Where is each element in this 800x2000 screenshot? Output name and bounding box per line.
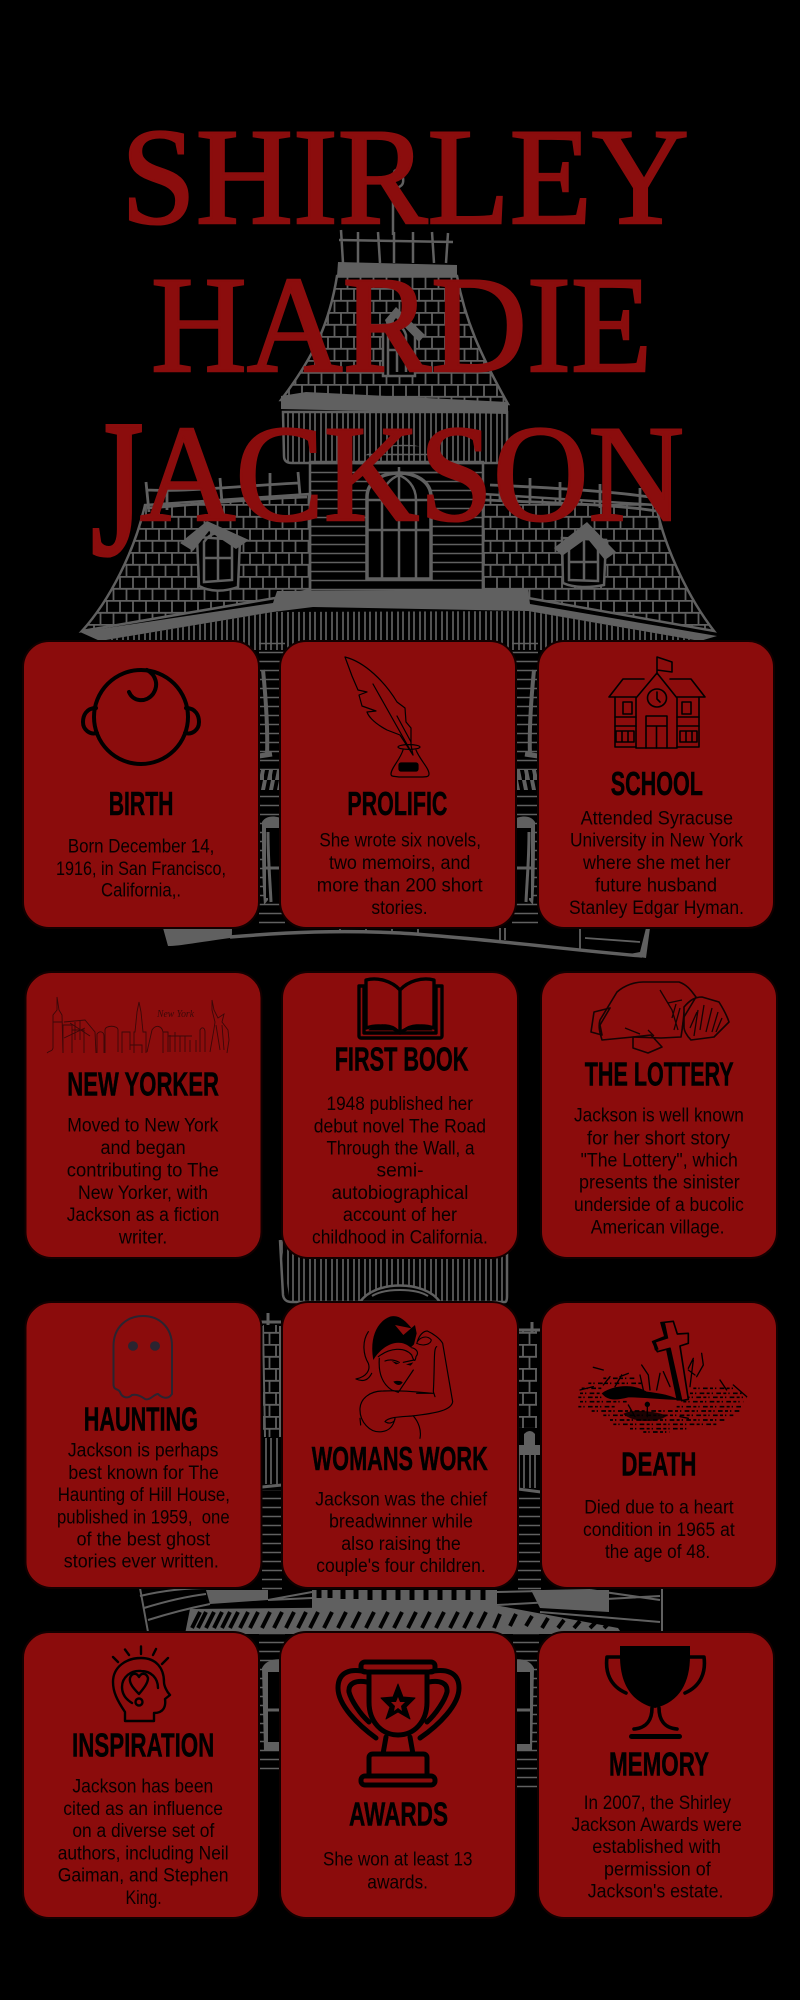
tower body [283,412,507,463]
text: first book: Through the Wall, a [326,1139,475,1160]
text: school: where she met her [582,853,731,874]
skyline caption: New York [156,1009,195,1020]
heading: prolific: PROLIFIC [347,785,447,822]
card: the lottery [541,972,777,1258]
text: prolific: more than 200 short [317,876,483,897]
text: inspiration: Jackson has been [72,1777,213,1798]
house illustration [80,170,717,1790]
icon: grave with cross [578,1321,747,1432]
text: inspiration: authors, including Neil [58,1844,229,1865]
heading: inspiration: INSPIRATION [72,1727,214,1764]
icon: ghost [114,1316,172,1399]
card: birth [23,641,259,928]
heading: first book: FIRST BOOK [335,1041,469,1078]
text: first book: childhood in California. [312,1228,488,1249]
hatching under cornice [100,611,700,650]
text: prolific: stories. [371,898,428,919]
text: prolific [317,831,483,919]
text: inspiration: on a diverse set of [72,1821,215,1842]
text: inspiration: King. [126,1888,162,1909]
icon: quill and ink [345,657,429,777]
wall gap details, fourth row [259,1632,539,1790]
text: new yorker: Moved to New York [67,1116,219,1137]
lower cornice, first row [163,928,650,958]
text: inspiration: cited as an influence [63,1799,223,1820]
text: first book: semi- [376,1161,424,1182]
icon: rocks [591,982,729,1053]
title: HARDIE [151,248,652,401]
text: birth: 1916, in San Francisco, [56,859,226,880]
text: new yorker: New Yorker, with [78,1183,208,1204]
text: haunting: stories ever written. [64,1552,219,1573]
card: memory [538,1632,774,1918]
title: J [91,381,144,597]
text: the lottery: American village. [591,1217,724,1238]
text: school: Stanley Edgar Hyman. [569,898,744,919]
arched door window [352,444,454,579]
text: memory: permission of [604,1860,711,1881]
card: new yorker [26,972,262,1258]
text: the lottery: underside of a bucolic [574,1195,744,1216]
heading: haunting: HAUNTING [84,1401,198,1438]
card: inspiration [23,1632,259,1918]
text: prolific: two memoirs, and [329,853,470,874]
heading: school: SCHOOL [611,765,703,802]
text: the lottery [574,1106,744,1238]
tower band [281,392,508,414]
text: birth: Born December 14, [68,837,214,858]
wall gap details, first row [259,640,286,930]
tower cap [337,262,457,277]
text: womans work [315,1490,488,1577]
text: haunting: of the best ghost [76,1530,211,1551]
text: haunting: Jackson is perhaps [68,1441,218,1462]
text: memory: Jackson's estate. [588,1882,724,1903]
text: first book: autobiographical [332,1183,468,1204]
text: memory [571,1793,742,1903]
title: ACKSON [140,397,684,550]
text: new yorker: writer. [118,1228,167,1249]
brick column, left [260,1313,282,1590]
spire [393,170,403,235]
heading: birth: BIRTH [109,785,174,822]
text: death [583,1498,735,1563]
text: memory: In 2007, the Shirley [584,1793,731,1814]
text: memory: established with [592,1837,721,1858]
text: haunting [57,1441,230,1573]
text: new yorker: Jackson as a fiction [67,1205,219,1226]
heading: womans work: WOMANS WORK [312,1440,488,1477]
text: the lottery: presents the sinister [579,1173,740,1194]
text: haunting: published in 1959, one [57,1507,230,1528]
tower dormer [383,307,425,376]
text: womans work: also raising the [341,1534,461,1555]
card: awards [280,1632,516,1918]
text: school: University in New York [570,831,743,852]
text: womans work: couple's four children. [316,1556,486,1577]
tower railing [339,230,453,263]
left wing railing [146,472,307,512]
text: birth: California,. [101,881,181,902]
text: inspiration: Gaiman, and Stephen [58,1866,229,1887]
text: the lottery: "The Lottery", which [581,1151,738,1172]
icon: baby head [83,670,199,764]
text: school: Attended Syracuse [581,808,733,829]
heading: new yorker: NEW YORKER [67,1066,219,1103]
icon: woman flexing arm [356,1316,453,1438]
text: haunting: best known for The [68,1463,219,1484]
text: memory: Jackson Awards were [571,1815,742,1836]
card: death [541,1302,777,1588]
card: haunting [26,1302,262,1588]
icon: trophy with star [338,1662,459,1785]
text: awards: awards. [367,1873,428,1894]
text: first book: debut novel The Road [314,1116,486,1137]
text: the lottery: Jackson is well known [574,1106,744,1127]
right wing roof [483,494,714,631]
text: new yorker: and began [100,1138,186,1159]
text: awards [323,1850,472,1894]
tower roof [281,276,508,404]
heading: death: DEATH [621,1446,696,1483]
text: awards: She won at least 13 [323,1850,472,1871]
title: SHIRLEY [121,100,689,253]
text: inspiration [58,1777,229,1909]
icon: solid trophy [607,1646,704,1739]
center wall [310,462,483,592]
card: womans work [282,1302,518,1588]
text: death: Died due to a heart [584,1498,734,1519]
card: prolific [280,641,516,928]
text: new yorker [67,1116,219,1249]
lower tower section, second row gap [280,1240,507,1302]
card: first book [282,972,518,1258]
icon: head with heart [113,1646,170,1721]
icon: new york skyline [47,997,229,1053]
text: first book: 1948 published her [326,1094,474,1115]
text: school [569,808,744,919]
text: new yorker: contributing to The [67,1161,219,1182]
icon: schoolhouse [609,657,705,748]
icon: open book [359,979,442,1038]
text: the lottery: for her short story [587,1128,730,1149]
right wing railing [485,478,656,511]
right dormer [554,522,616,587]
text: first book [312,1094,488,1249]
heading: awards: AWARDS [349,1795,448,1832]
text: death: the age of 48. [605,1542,710,1563]
text: birth [56,837,226,902]
main cornice band [80,589,717,641]
text: death: condition in 1965 at [583,1520,735,1541]
left dormer [180,521,249,591]
title [91,100,689,597]
heading: memory: MEMORY [609,1746,709,1783]
left wing roof [82,494,310,631]
brick column, right [518,1322,541,1590]
text: womans work: breadwinner while [329,1512,473,1533]
text: womans work: Jackson was the chief [315,1490,488,1511]
text: school: future husband [595,876,717,897]
card: school [538,641,774,928]
porch lines, third row gap [140,1588,662,1634]
text: haunting: Haunting of Hill House, [58,1485,230,1506]
text: prolific: She wrote six novels, [319,831,481,852]
text: first book: account of her [343,1205,458,1226]
